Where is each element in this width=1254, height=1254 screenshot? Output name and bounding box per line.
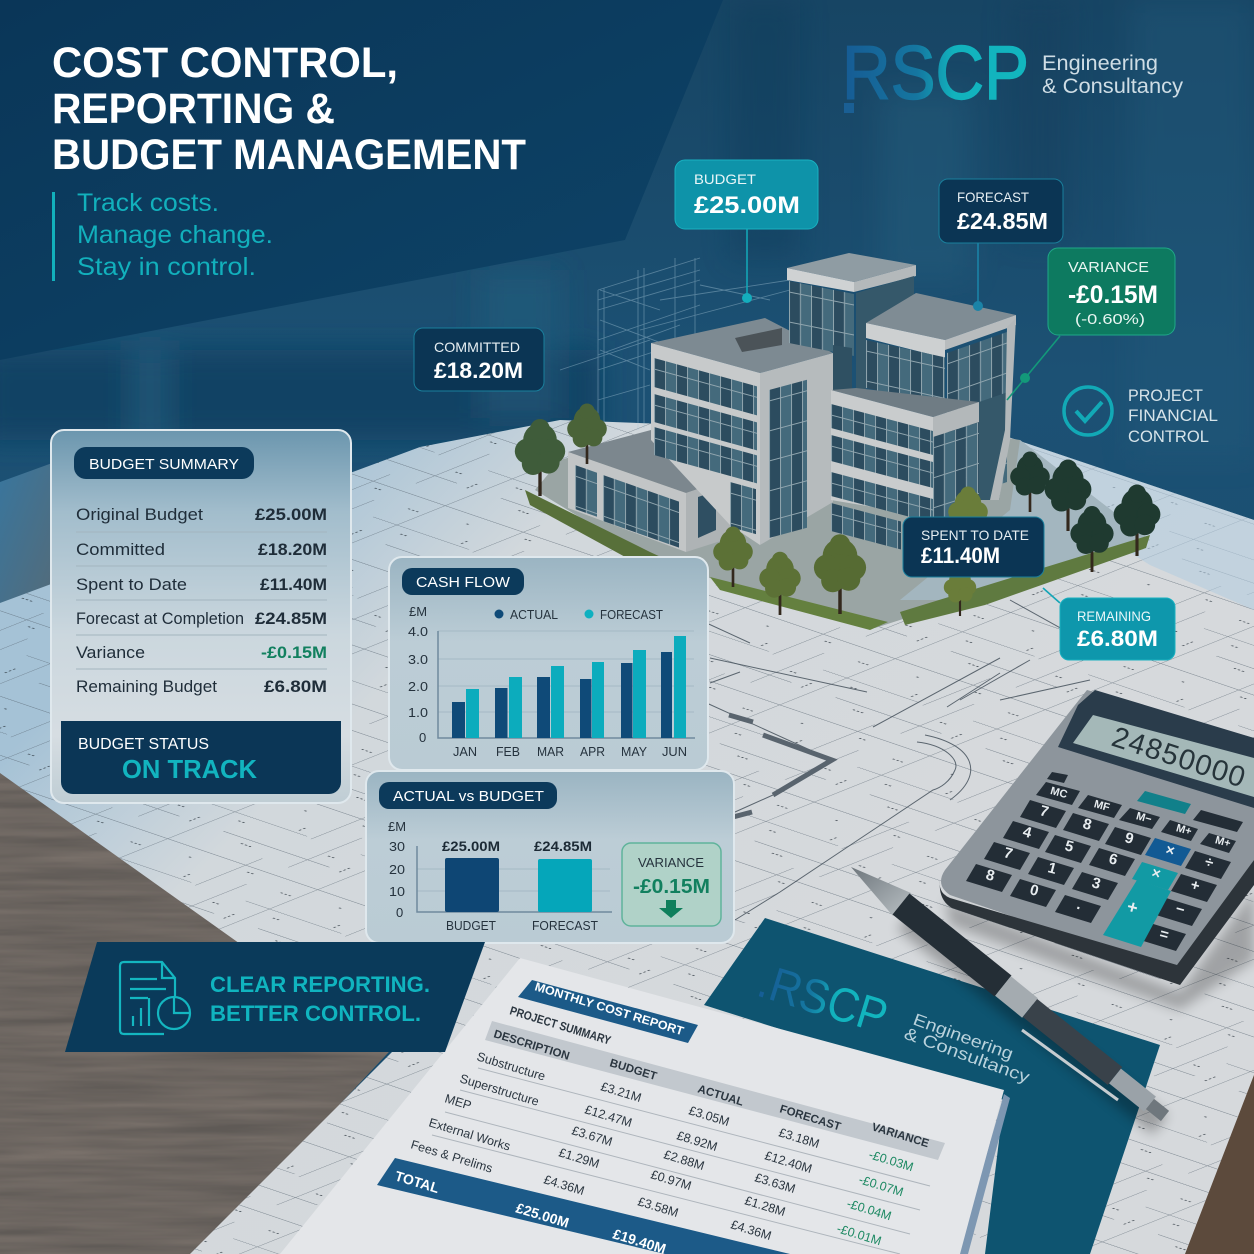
calculator keys: +: [1125, 896, 1140, 918]
budget status: [61, 721, 341, 794]
title: COST CONTROL,: [52, 39, 398, 87]
cash flow bar chart: 1.0: [408, 705, 428, 720]
calculator keys: 6: [1107, 850, 1119, 869]
report table text: Substructure: [475, 1049, 547, 1084]
actual vs budget bar chart: £24.85M: [534, 838, 592, 854]
pen: [851, 867, 1165, 1125]
report table text: PROJECT SUMMARY: [508, 1003, 613, 1048]
report table text: MONTHLY COST REPORT: [533, 979, 686, 1038]
report table text: VARIANCE: [870, 1121, 931, 1150]
calculator keys: M−: [1135, 810, 1153, 826]
report table text: [393, 979, 931, 1254]
budget rows: Original Budget: [76, 505, 203, 524]
calculator keys: 7: [1038, 802, 1050, 821]
calculator keys: −: [1174, 900, 1187, 919]
project financial control badge: PROJECT: [1128, 387, 1203, 405]
calculator keys: 7: [1002, 844, 1014, 863]
tagline: Stay in control.: [77, 253, 256, 281]
budget rows: £11.40M: [260, 575, 327, 594]
report table text: -£0.04M: [845, 1196, 893, 1223]
tagline: Track costs.: [77, 189, 219, 217]
report table text: -£0.07M: [857, 1172, 905, 1199]
budget rows: Remaining Budget: [76, 677, 217, 696]
budget rows: Forecast at Completion: [76, 609, 244, 628]
callout: budget: BUDGET: [694, 171, 756, 187]
logo: [842, 31, 1184, 116]
monthly cost report sheet: [280, 958, 1010, 1254]
report table text: £3.18M: [777, 1125, 821, 1151]
report table text: £12.40M: [763, 1148, 814, 1176]
heading: cash flow: [402, 568, 524, 595]
calculator keys: [966, 772, 1243, 951]
heading: budget summary: BUDGET SUMMARY: [89, 456, 239, 473]
budget rows: £25.00M: [255, 505, 327, 524]
low wing: [568, 430, 730, 552]
budget status: ON TRACK: [122, 754, 257, 784]
title: [52, 39, 526, 179]
callout: spent to date: £11.40M: [921, 543, 1000, 568]
legend: ACTUAL: [510, 608, 558, 622]
calculator keys: +: [1189, 876, 1202, 895]
variance card: -£0.15M: [633, 876, 710, 898]
calculator keys: MC: [1049, 785, 1069, 801]
report table text: -£0.01M: [835, 1221, 883, 1248]
calculator: 24850000: [1108, 721, 1249, 794]
budget rows: £6.80M: [264, 677, 327, 696]
variance card: VARIANCE: [638, 855, 704, 870]
actual vs budget bar chart: FORECAST: [532, 918, 598, 933]
panel: budget summary: [51, 430, 351, 803]
legend: [494, 608, 663, 622]
actual vs budget bar chart: 0: [396, 905, 403, 920]
budget rows: [76, 505, 327, 696]
cash flow bar chart: 0: [419, 730, 426, 745]
cash flow bar chart: £M: [409, 604, 427, 619]
report table text: £4.36M: [542, 1172, 586, 1198]
callout: spent to date: SPENT TO DATE: [921, 527, 1029, 543]
actual vs budget bar chart: 20: [389, 862, 405, 877]
building: [568, 253, 1016, 552]
report table text: ACTUAL: [696, 1083, 745, 1109]
site landscape: [525, 400, 1150, 630]
report table text: £3.63M: [753, 1170, 797, 1196]
actual vs budget bar chart: £M: [388, 819, 406, 834]
heading: cash flow: CASH FLOW: [416, 574, 511, 591]
heading: actual vs budget: [379, 782, 557, 809]
right block: [866, 293, 1016, 503]
calculator keys: 5: [1063, 837, 1075, 856]
folder: Engineering: [911, 1010, 1016, 1064]
calculator keys: .: [1075, 896, 1083, 913]
left block: [651, 318, 833, 545]
cash flow bar chart: JUN: [662, 744, 687, 759]
callout: forecast: [939, 179, 1063, 243]
cash flow bar chart: 3.0: [408, 652, 428, 667]
calculator keys: 1: [1046, 859, 1058, 878]
folder: .RSCP: [752, 955, 894, 1044]
panel: cash flow: [389, 557, 708, 770]
logo: RSCP: [842, 31, 1029, 116]
actual vs budget bar chart: 30: [389, 839, 405, 854]
title: BUDGET MANAGEMENT: [52, 131, 526, 179]
banner text: BETTER CONTROL.: [210, 1001, 421, 1026]
callout: remaining: REMAINING: [1077, 608, 1151, 624]
report table text: Fees & Prelims: [409, 1137, 494, 1176]
report table text: £2.88M: [662, 1147, 706, 1173]
report table text: £3.58M: [636, 1194, 680, 1220]
cash flow bar chart: JAN: [453, 744, 477, 759]
report table text: FORECAST: [778, 1103, 842, 1133]
report table text: £25.00M: [514, 1200, 571, 1231]
budget rows: Committed: [76, 540, 165, 559]
hero background panel: [0, 0, 723, 360]
callout: committed: £18.20M: [434, 358, 523, 383]
report table text: External Works: [427, 1115, 512, 1154]
tagline: [52, 189, 273, 281]
callout: remaining: £6.80M: [1077, 626, 1158, 651]
report table text: MEP: [443, 1091, 473, 1113]
heading: actual vs budget: ACTUAL vs BUDGET: [393, 788, 544, 805]
calculator keys: 9: [1123, 829, 1135, 848]
report table text: £1.28M: [743, 1193, 787, 1219]
budget rows: Spent to Date: [76, 575, 187, 594]
callout: committed: [414, 328, 544, 391]
budget rows: £18.20M: [258, 540, 327, 559]
report table text: BUDGET: [608, 1057, 658, 1083]
report table text: -£0.03M: [867, 1147, 915, 1174]
icon: report document: [120, 962, 190, 1034]
report table text: Superstructure: [458, 1071, 541, 1109]
callout: spent to date: [903, 517, 1044, 577]
actual vs budget bar chart: [388, 819, 612, 933]
callout: variance: -£0.15M: [1068, 281, 1158, 309]
project financial control badge: CONTROL: [1128, 428, 1209, 446]
report table text: £8.92M: [675, 1128, 719, 1154]
budget rows: £24.85M: [255, 609, 327, 628]
report table text: DESCRIPTION: [492, 1028, 571, 1063]
scaffold wireframe: [560, 258, 790, 430]
cash flow bar chart: MAR: [537, 744, 564, 759]
callout: budget: £25.00M: [694, 192, 800, 219]
folder: [704, 918, 1160, 1254]
legend: FORECAST: [600, 608, 663, 622]
budget status: BUDGET STATUS: [78, 736, 209, 753]
banner text: [210, 972, 430, 1026]
callout: budget: [675, 160, 818, 229]
calculator keys: 3: [1090, 874, 1102, 893]
central tower: [787, 253, 916, 395]
panel: actual vs budget: [366, 771, 734, 943]
calculator keys: ×: [1164, 841, 1177, 860]
calculator keys: 8: [1081, 815, 1093, 834]
folder: & Consultancy: [902, 1024, 1033, 1087]
report table text: £3.67M: [570, 1123, 614, 1149]
report table text: £3.21M: [599, 1079, 643, 1105]
actual vs budget bar chart: 10: [389, 884, 405, 899]
callout connector lines: [742, 229, 1060, 603]
report table text: £3.05M: [687, 1103, 731, 1129]
calculator keys: 8: [984, 866, 996, 885]
budget rows: -£0.15M: [261, 643, 327, 662]
cash flow bar chart: MAY: [621, 744, 647, 759]
report table text: TOTAL: [393, 1168, 442, 1196]
callout: forecast: £24.85M: [957, 208, 1048, 234]
heading: budget summary: [74, 447, 254, 479]
cash flow bar chart: FEB: [496, 744, 520, 759]
report table text: £0.97M: [649, 1167, 693, 1193]
report table text: £12.47M: [583, 1102, 634, 1130]
blueprint sheet: [0, 420, 1254, 1254]
report table text: £1.29M: [557, 1145, 601, 1171]
tagline: Manage change.: [77, 221, 273, 249]
calculator: [940, 690, 1254, 1010]
callout: forecast: FORECAST: [957, 189, 1029, 205]
calculator keys: ÷: [1203, 853, 1215, 872]
cash flow bar chart: 2.0: [408, 679, 428, 694]
report table text: £4.36M: [729, 1217, 773, 1243]
calculator keys: 0: [1028, 881, 1040, 900]
title: REPORTING &: [52, 85, 335, 133]
calculator keys: =: [1158, 925, 1171, 944]
calculator keys: MF: [1093, 798, 1111, 814]
callout: committed: COMMITTED: [434, 339, 520, 355]
cash flow bar chart: [408, 604, 695, 759]
variance card: [622, 843, 721, 926]
project financial control badge: FINANCIAL: [1128, 407, 1218, 425]
middle tier: [831, 388, 979, 550]
cash flow bar chart: 4.0: [408, 624, 428, 639]
callout: variance: VARIANCE: [1068, 259, 1149, 276]
actual vs budget bar chart: £25.00M: [442, 838, 500, 854]
banner: clear reporting: [65, 942, 485, 1052]
trees: [515, 404, 1160, 616]
budget rows: Variance: [76, 643, 145, 662]
calculator keys: 4: [1021, 823, 1034, 842]
calculator keys: M+: [1175, 822, 1193, 838]
callout: variance: (-0.60%): [1075, 311, 1145, 328]
cash flow bar chart: APR: [580, 744, 605, 759]
logo: Engineering: [1042, 52, 1158, 75]
project financial control badge: [1064, 387, 1218, 446]
actual vs budget bar chart: BUDGET: [446, 918, 496, 933]
banner text: CLEAR REPORTING.: [210, 972, 430, 997]
callout: variance: [1048, 248, 1175, 335]
calculator keys: M+: [1214, 834, 1232, 850]
callout: remaining: [1060, 598, 1175, 660]
calculator keys: ×: [1150, 864, 1163, 883]
logo: & Consultancy: [1042, 75, 1184, 98]
